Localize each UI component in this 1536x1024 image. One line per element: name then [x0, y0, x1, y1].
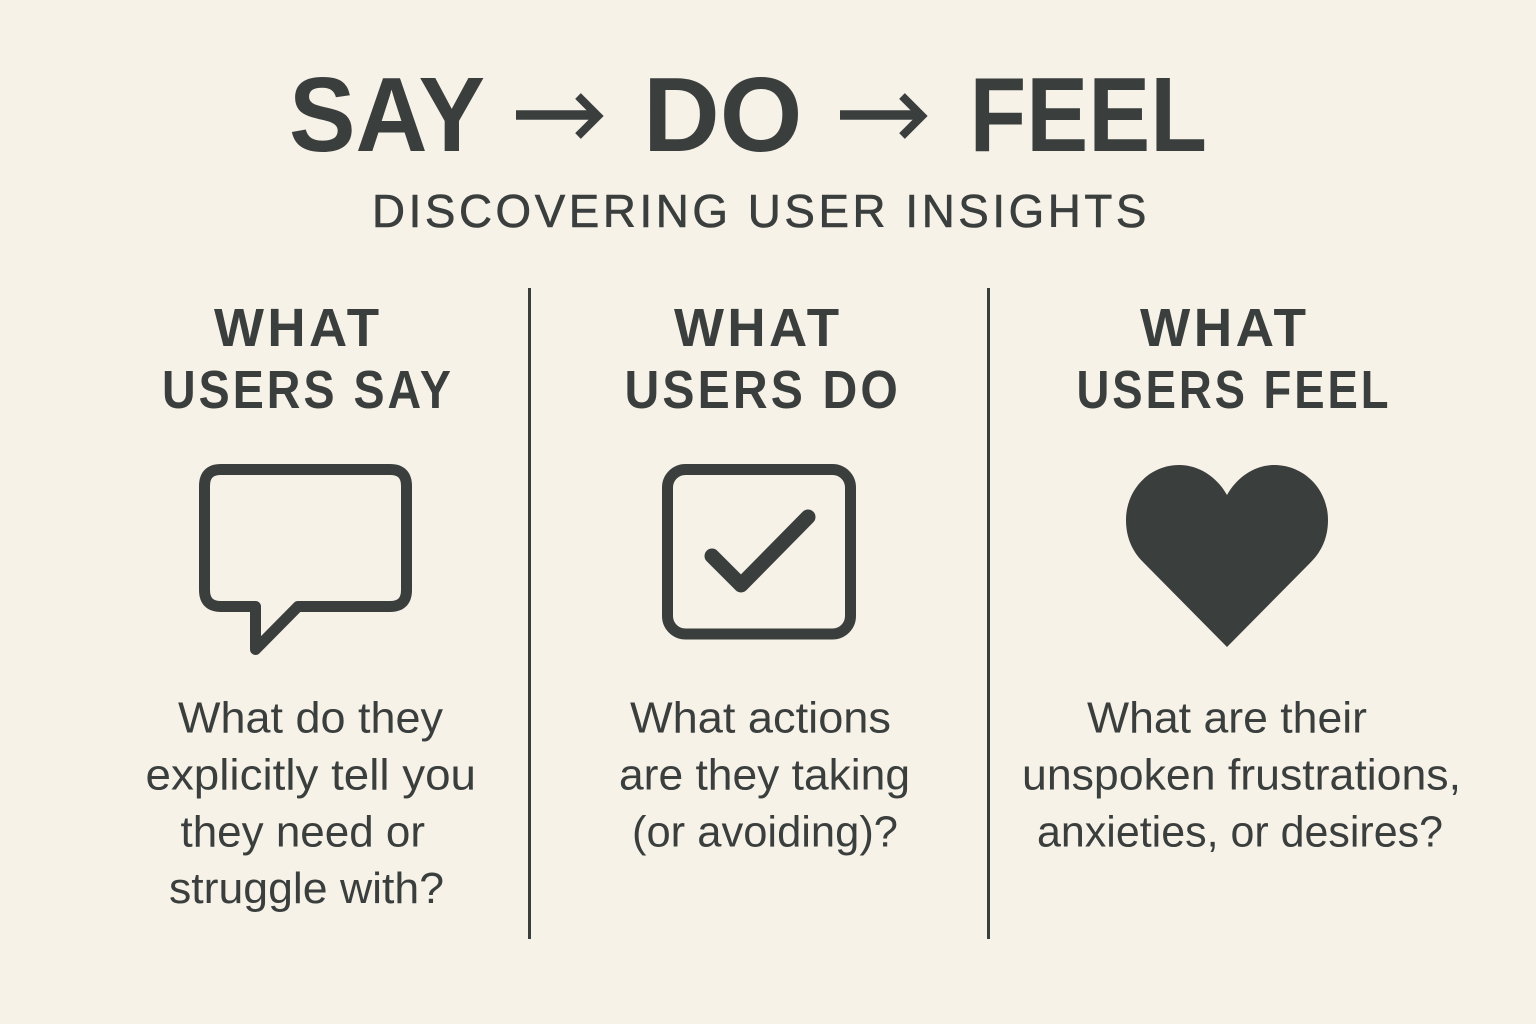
panel: what users say — [146, 298, 476, 913]
body text: say: What do they — [178, 694, 443, 742]
divider right — [987, 288, 990, 939]
body text: do: (or avoiding)? — [632, 808, 898, 856]
body text: say: struggle with? — [169, 864, 444, 913]
heading: what users say: USERS SAY — [162, 360, 454, 420]
body text: do: What actions — [630, 694, 891, 742]
arrow: do to feel — [840, 96, 922, 136]
body text: say: explicitly tell you — [146, 750, 476, 800]
icon: speech bubble — [204, 470, 406, 650]
panel: what users feel — [1022, 298, 1461, 856]
body text: say — [146, 694, 476, 913]
body text: do: are they taking — [619, 750, 910, 800]
title word: feel: FEEL — [970, 56, 1207, 174]
body text: feel: anxieties, or desires? — [1037, 808, 1443, 856]
heading: what users feel: USERS FEEL — [1076, 360, 1392, 420]
body text: feel: What are their — [1087, 694, 1367, 742]
body text: feel — [1022, 694, 1461, 856]
heading: what users say — [162, 298, 454, 420]
panel: what users do — [619, 298, 910, 856]
heading: what users feel: WHAT — [1140, 298, 1310, 358]
arrow: say to do — [516, 96, 598, 136]
body text: say: they need or — [180, 808, 425, 856]
heading: what users do — [624, 298, 901, 420]
icon: heart — [1126, 465, 1328, 647]
title word: do: DO — [643, 56, 802, 174]
body text: feel: unspoken frustrations, — [1022, 750, 1461, 800]
title: say do feel — [289, 56, 1207, 174]
title word: say: SAY — [289, 56, 485, 174]
icon: checkbox — [668, 470, 850, 634]
divider left — [528, 288, 531, 939]
subtitle: DISCOVERING USER INSIGHTS — [372, 185, 1150, 237]
heading: what users feel — [1076, 298, 1392, 420]
heading: what users do: WHAT — [674, 298, 842, 358]
heading: what users say: WHAT — [214, 298, 382, 358]
body text: do — [619, 694, 910, 856]
heading: what users do: USERS DO — [624, 360, 901, 420]
